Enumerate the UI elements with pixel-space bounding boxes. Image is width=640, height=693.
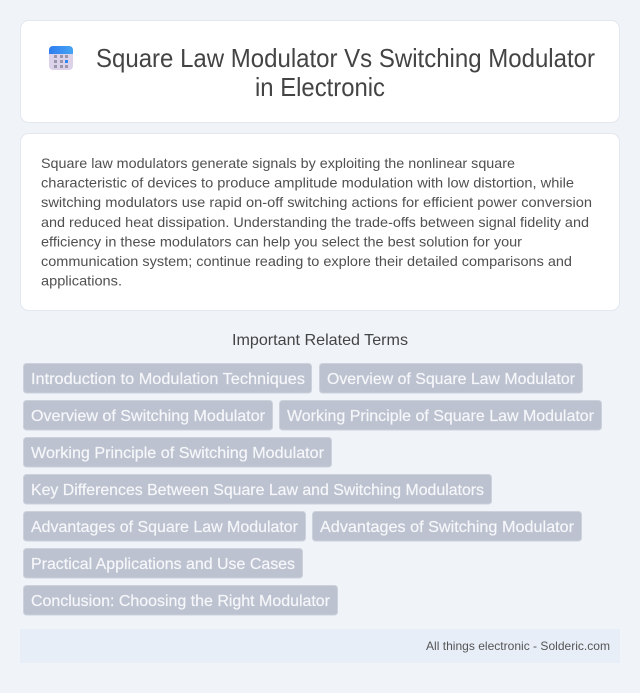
tag: Key Differences Between Square Law and Switching Modulators (31, 482, 484, 499)
panel: summary text: characteristic of devices to produce amplitude modulation with low distortion, while (41, 175, 574, 191)
title (96, 43, 595, 102)
panel: summary text: Square law modulators generate signals by exploiting the nonlinear square (41, 155, 515, 171)
title: in Electronic (255, 72, 385, 102)
tag list (24, 364, 602, 615)
panel: summary text: applications. (41, 273, 122, 289)
panel: summary text: communication system; continue reading to explore their detailed comparisons and (41, 253, 572, 269)
tag: Overview of Switching Modulator (31, 408, 266, 425)
tag: Introduction to Modulation Techniques (31, 371, 305, 388)
panel: summary text (20, 134, 620, 310)
tag: Working Principle of Square Law Modulator (287, 408, 595, 425)
title: Square Law Modulator Vs Switching Modulator (96, 43, 595, 73)
tag (24, 400, 272, 430)
tag (24, 586, 338, 615)
tag (312, 512, 582, 541)
icon: calendar (49, 46, 73, 70)
panel: summary text: switching modulators use rapid on-off switching actions for efficient power conversion (41, 194, 592, 210)
tag (280, 400, 602, 430)
tag (24, 364, 312, 393)
tag (24, 512, 306, 541)
panel: summary text: efficiency in these modulators can help you select the best solution for your (41, 233, 522, 249)
tag: Overview of Square Law Modulator (327, 371, 576, 388)
panel: title card (20, 20, 620, 122)
footer bar (20, 629, 620, 663)
tag (24, 438, 332, 467)
tag: Conclusion: Choosing the Right Modulator (31, 593, 331, 610)
panel: summary text: and reduced heat dissipation. Understanding the trade-offs between signal fidelity and (41, 214, 589, 230)
heading: important related terms: Important Related Terms (232, 332, 408, 349)
tag (24, 474, 492, 504)
tag: Practical Applications and Use Cases (31, 556, 295, 573)
tag: Advantages of Switching Modulator (320, 519, 575, 536)
tag: Working Principle of Switching Modulator (31, 445, 325, 462)
tag (24, 548, 302, 578)
tag (320, 364, 582, 393)
tag: Advantages of Square Law Modulator (31, 519, 299, 536)
footer bar: All things electronic - Solderic.com (426, 639, 610, 653)
